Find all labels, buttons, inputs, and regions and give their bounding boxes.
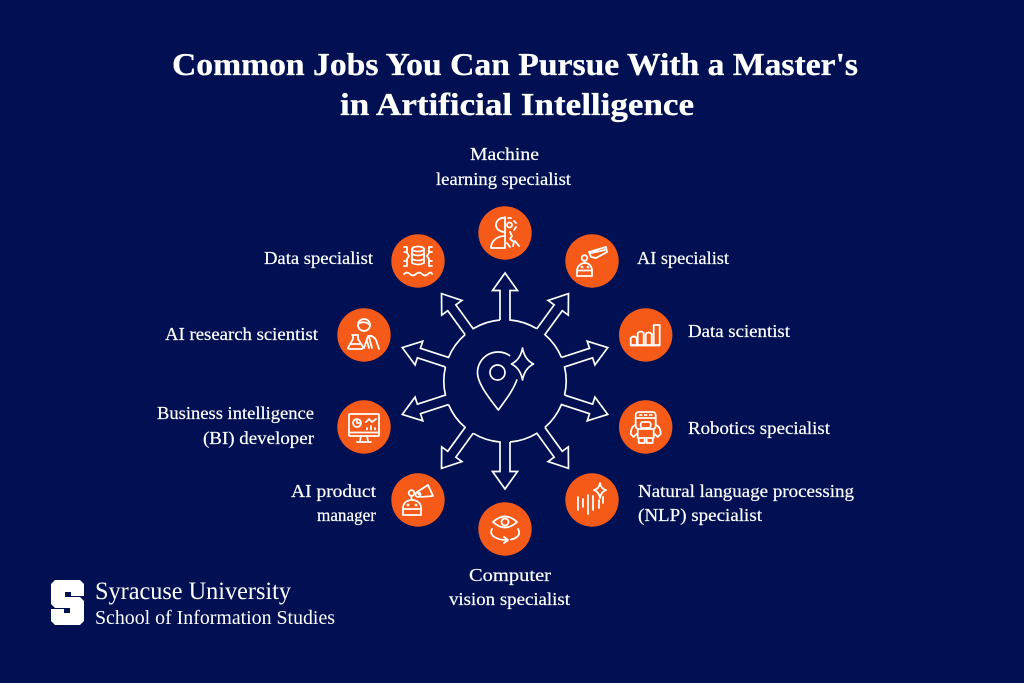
- label: Computer: [469, 565, 551, 585]
- arrow: upper right: [526, 286, 594, 357]
- label: (NLP) specialist: [638, 505, 762, 526]
- label: AI specialist: [637, 248, 729, 268]
- title: Common Jobs You Can Pursue With a Master's: [172, 46, 858, 82]
- label: [157, 403, 314, 449]
- label: manager: [317, 505, 376, 525]
- label: Data scientist: [688, 321, 790, 341]
- label: [638, 481, 854, 526]
- icon: robot with camera: [565, 234, 619, 288]
- icon: robot: [619, 400, 672, 454]
- label: vision specialist: [449, 589, 570, 609]
- label: Machine: [470, 144, 539, 164]
- icon: sound waves with sparkle: [565, 473, 619, 527]
- icon: scientist with flask: [337, 308, 391, 362]
- label: [449, 565, 570, 609]
- label: Business intelligence: [157, 403, 314, 423]
- arrow: down: [473, 433, 518, 489]
- arrow: right lower: [545, 385, 612, 445]
- label: learning specialist: [436, 169, 571, 189]
- job: AI product manager: [291, 473, 445, 527]
- job: AI research scientist: [165, 308, 391, 362]
- label: Natural language processing: [638, 481, 854, 501]
- icon: eye with rotating arrows: [478, 502, 532, 556]
- wordmark: [95, 578, 335, 629]
- label: [436, 144, 571, 189]
- title: in Artificial Intelligence: [340, 86, 694, 122]
- job: machine learning specialist: [436, 144, 571, 260]
- job: robotics specialist: [619, 400, 830, 454]
- icon: database with braces and wave: [391, 234, 445, 288]
- icon: machine learning head and gear: [478, 206, 532, 260]
- label: [291, 481, 376, 525]
- label: Robotics specialist: [688, 418, 830, 438]
- arrow: lower left: [416, 405, 484, 476]
- job: natural language processing specialist: [565, 473, 854, 527]
- icon: dashboard monitor: [337, 400, 391, 454]
- arrow: left upper: [398, 317, 465, 377]
- arrow: up: [492, 273, 537, 329]
- arrow: upper left: [431, 275, 500, 346]
- job: computer vision specialist: [449, 502, 570, 609]
- label: AI product: [291, 481, 376, 501]
- central hub with radiating arrows: [392, 273, 618, 489]
- job: business intelligence developer: [157, 400, 391, 454]
- icon: block S: [51, 580, 84, 625]
- logo: Syracuse University School of Information Studies: [51, 578, 335, 629]
- title: [172, 46, 858, 122]
- job: data scientist: [619, 308, 790, 362]
- wordmark: School of Information Studies: [95, 607, 335, 629]
- wordmark: Syracuse University: [95, 578, 291, 605]
- icon: bar chart: [619, 308, 672, 362]
- arrow: right upper: [551, 336, 618, 395]
- label: (BI) developer: [203, 428, 314, 449]
- arrow: left lower: [392, 367, 459, 426]
- job: AI specialist: [565, 234, 729, 288]
- label: AI research scientist: [165, 324, 318, 344]
- label: Data specialist: [264, 248, 373, 268]
- job: data specialist: [264, 234, 445, 288]
- arrow: lower right: [510, 416, 579, 487]
- icon: robot with megaphone: [391, 473, 445, 527]
- icon: location pin with sparkle: [478, 348, 534, 410]
